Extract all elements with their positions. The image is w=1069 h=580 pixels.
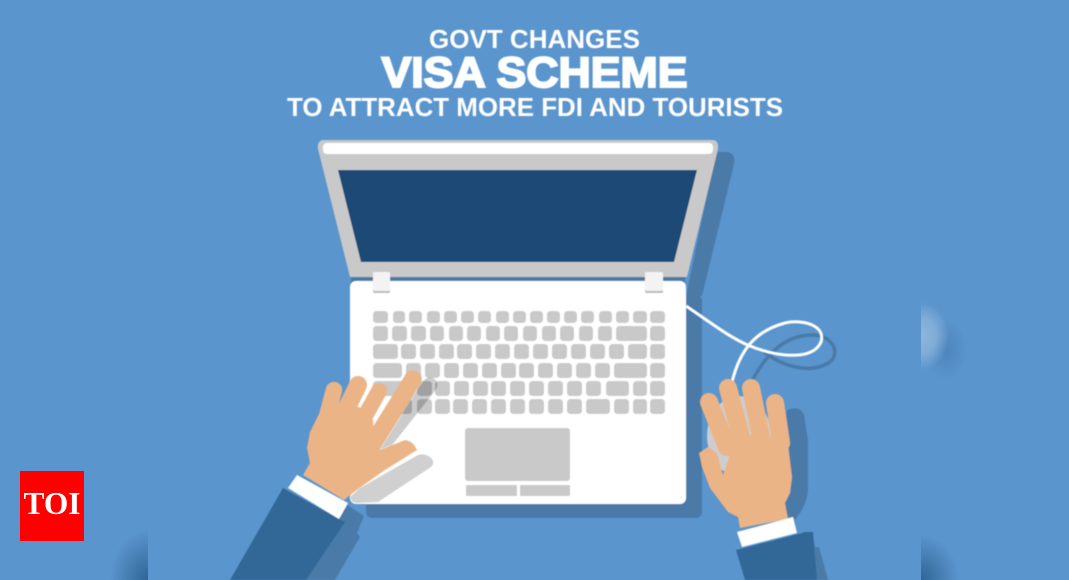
touchpad: [465, 428, 570, 496]
logo box: [20, 471, 84, 541]
mouse shadow: [770, 408, 808, 522]
right cuff: [737, 517, 797, 547]
TOI logo: [20, 471, 84, 541]
right palm and fingers: [699, 388, 792, 528]
title line 3: TO ATTRACT MORE FDI AND TOURISTS: [287, 92, 783, 122]
mouse cable: [686, 306, 822, 382]
mouse cable shadow: [752, 335, 835, 381]
lid frame: [318, 140, 718, 277]
left finger shadow: [378, 385, 430, 451]
mouse: [707, 396, 771, 476]
side artefact: right: [921, 302, 977, 580]
right sleeve: [736, 532, 817, 580]
left sleeve shadow: [300, 500, 364, 580]
screen: [338, 170, 697, 262]
title line 2: VISA SCHEME: [382, 49, 688, 97]
laptop illustration: [318, 140, 734, 518]
left palm and fingers: [303, 379, 417, 500]
keyboard: [373, 311, 665, 414]
lid top highlight: [323, 143, 713, 154]
title: [287, 24, 783, 122]
left hand: [230, 379, 433, 580]
laptop shadow: [351, 152, 734, 518]
right sleeve shadow: [803, 532, 828, 580]
left sleeve: [230, 488, 345, 580]
title line 1: GOVT CHANGES: [429, 24, 640, 54]
laptop base: [350, 281, 686, 504]
logo text: TOI: [24, 485, 80, 521]
laptop lid: [318, 140, 718, 277]
left thumb shadow: [350, 454, 433, 503]
side artefact: left: [110, 530, 148, 580]
left cuff: [288, 475, 348, 519]
hinges: [373, 272, 663, 293]
mouse and right hand: [699, 388, 828, 580]
